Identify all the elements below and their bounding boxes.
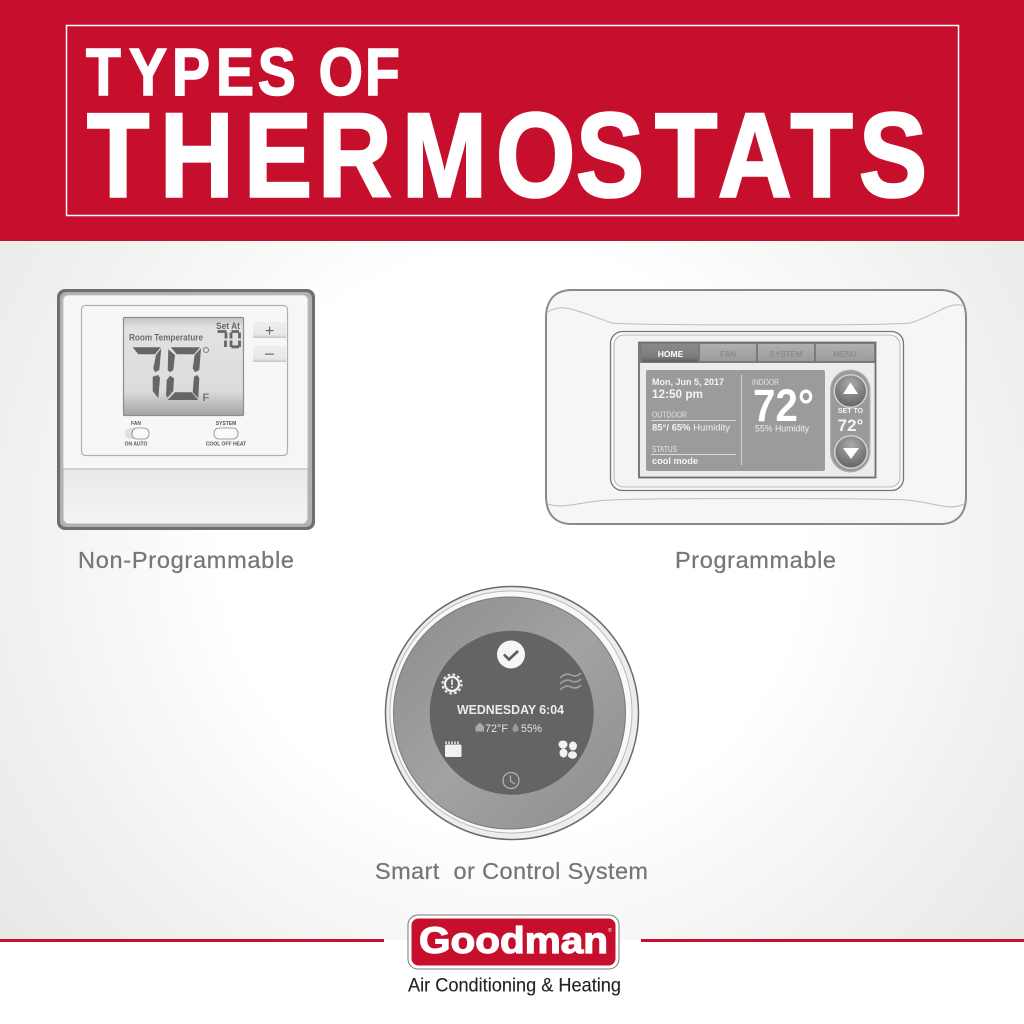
label: smart or control system: Smart or Control System [375,858,648,884]
tab: system: SYSTEM [770,350,803,359]
programmable thermostat [546,290,966,524]
screen panel: cool mode [652,456,698,467]
touch screen [639,342,876,478]
screen panel: Mon, Jun 5, 2017 [652,377,724,388]
screen panel: 55% Humidity [755,424,809,434]
screen panel: INDOOR [752,378,779,387]
set-to control: SET TO [838,408,864,415]
fan switch [125,421,149,448]
system switch: SYSTEM [216,421,236,427]
fan switch: FAN [131,421,141,427]
tab: menu [816,344,874,361]
date and time: WEDNESDAY 6:04 [457,703,564,717]
screen panel: OUTDOOR [652,410,687,420]
title banner: TYPES OF [86,36,400,110]
plus button [253,322,286,340]
fan switch: ON AUTO [125,442,147,448]
page background [0,241,1024,940]
goodman logo: Goodman [419,920,608,961]
icon: clock [503,772,519,788]
LCD screen: Room Temperature [129,332,203,342]
tab: fan: FAN [720,350,736,359]
icon: waves [560,673,581,690]
footer rule right [641,939,1024,942]
label: non-programmable: Non-Programmable [78,547,294,573]
set-to control: 72° [838,416,864,435]
tab: system [758,344,814,361]
label: programmable: Programmable [675,547,836,573]
indoor temperature: 72°F [485,723,508,735]
LCD screen: F [202,392,210,404]
title banner: THERMOSTATS [87,88,927,222]
screen panel: STATUS [652,445,677,454]
LCD screen: Set At [216,321,241,332]
set-to control [830,370,870,472]
icon: calendar [445,742,462,757]
icon: fan [558,740,577,759]
humidity: 55% [521,723,542,735]
logo tagline: Air Conditioning & Heating [408,976,621,996]
system switch [206,421,246,448]
minus button [253,346,286,362]
icon: check [497,640,525,668]
screen panel: 12:50 pm [652,387,703,401]
icon: gear [442,674,462,694]
screen panel: 72° [753,380,814,431]
system switch: COOL OFF HEAT [206,442,246,448]
title banner [0,0,1024,241]
tab: menu: MENU [833,350,857,359]
screen panel [646,370,825,471]
non-programmable thermostat [57,289,315,530]
tab: fan [700,344,756,361]
goodman logo [408,915,619,969]
tab: home [642,344,698,362]
goodman logo: ® [608,927,612,934]
humidity [512,723,542,735]
indoor temperature [476,722,508,735]
footer rule left [0,939,384,942]
smart thermostat [386,586,638,840]
screen panel: 85°/ 65% Humidity [652,422,730,434]
plus button: + [265,323,274,340]
tab: home: HOME [658,349,684,359]
LCD screen [124,318,244,416]
